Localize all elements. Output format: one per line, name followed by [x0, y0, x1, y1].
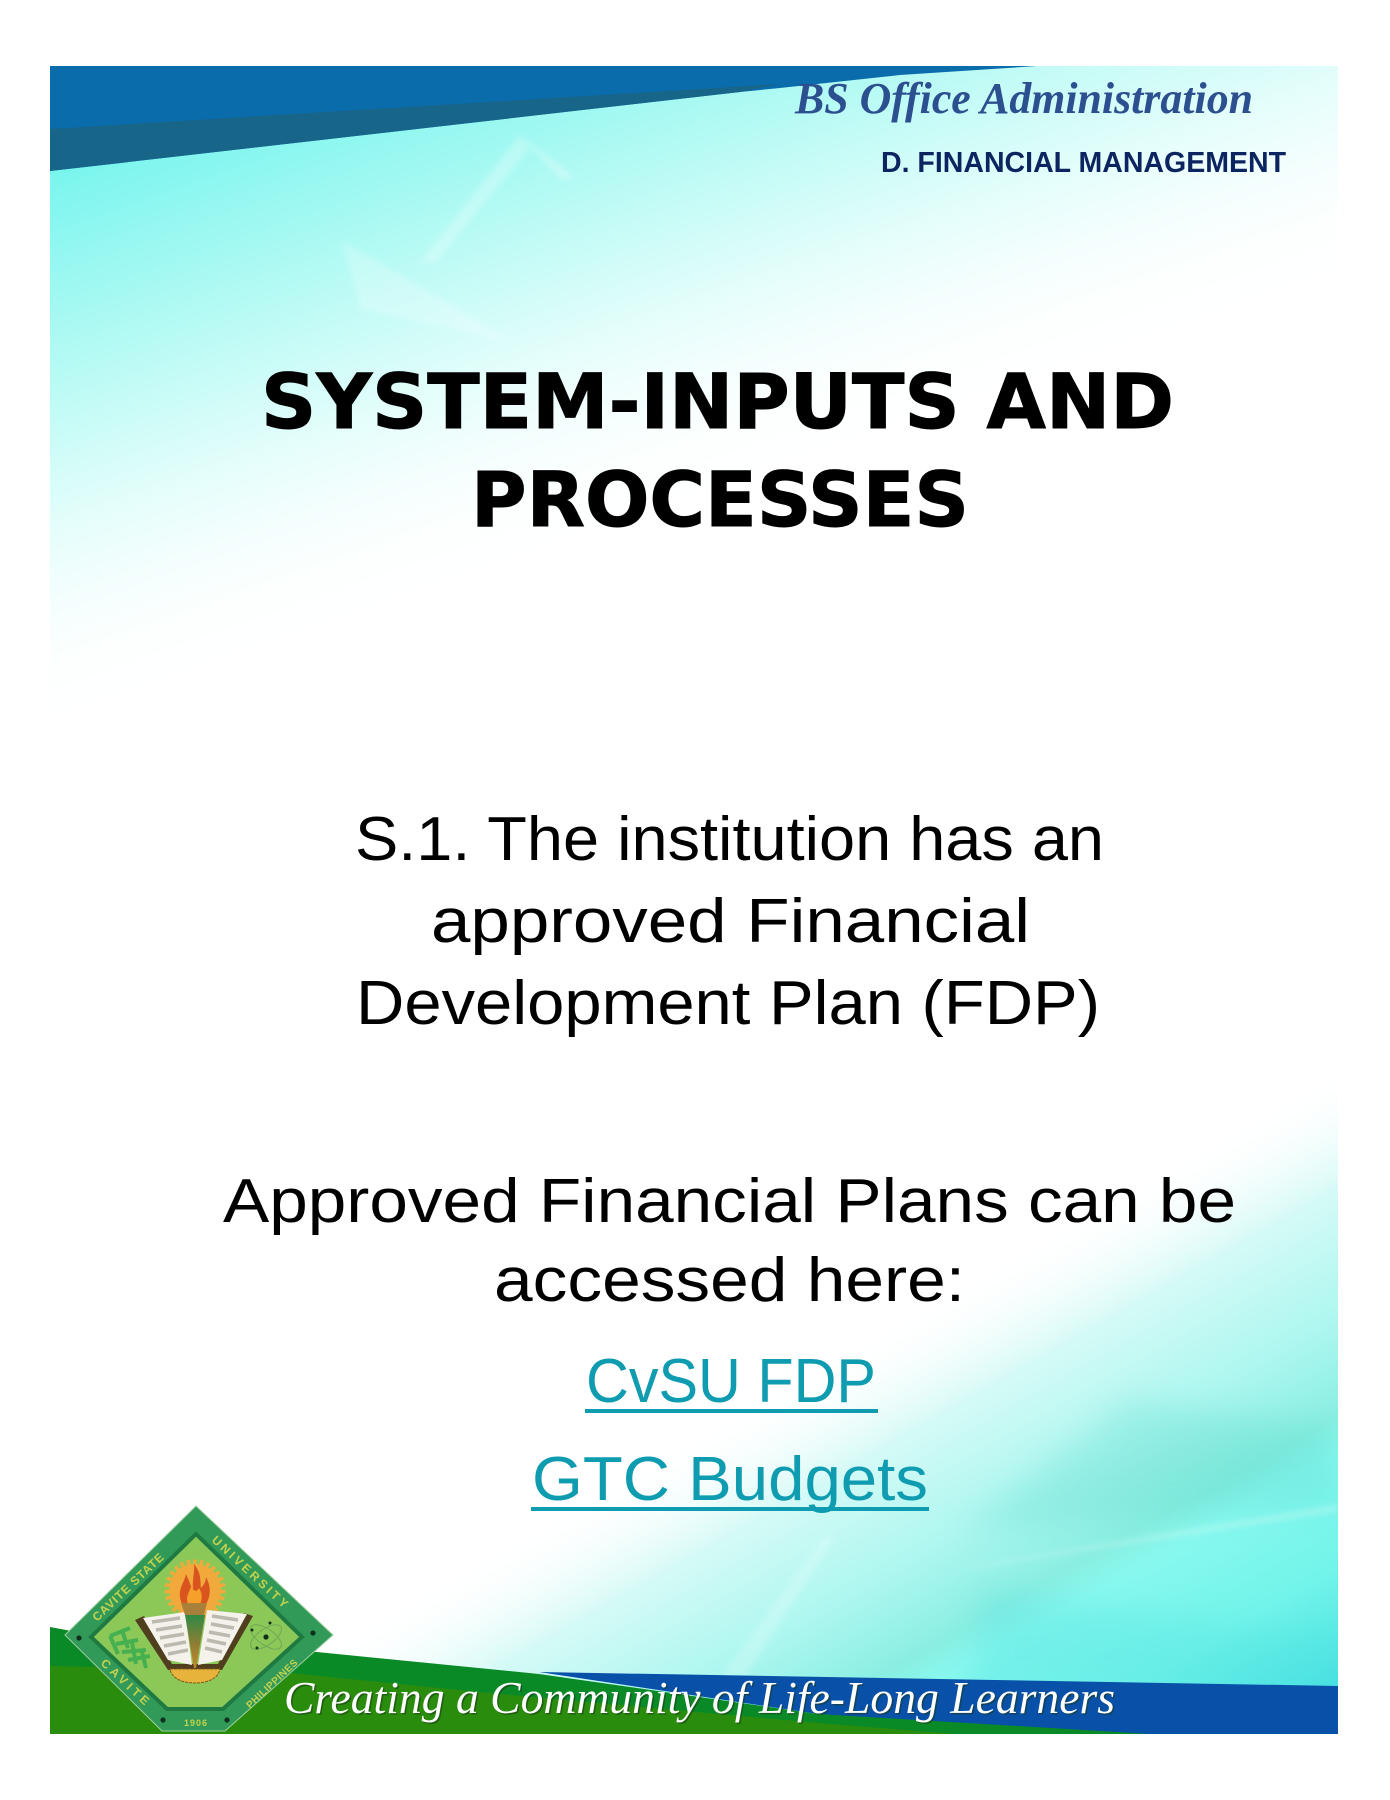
footer wave [50, 1627, 1338, 1734]
text block: standard S.1 [355, 805, 1104, 1038]
title: SYSTEM-INPUTS AND [261, 357, 1174, 446]
text block: standard S.1: Development Plan (FDP) [356, 969, 1100, 1038]
seal: lettering: CAVITE [102, 1660, 150, 1706]
seal: lettering: CAVITE STATE [93, 1552, 164, 1620]
seal: gear [170, 1669, 220, 1683]
text block: access note: Approved Financial Plans can be [223, 1167, 1236, 1236]
title [261, 357, 1174, 544]
link: GTC Budgets: GTC Budgets [532, 1445, 928, 1514]
seal: atom [247, 1620, 285, 1654]
text block: access note [223, 1167, 1236, 1315]
title: PROCESSES [471, 455, 969, 544]
seal: lettering: PHILIPPINES [246, 1660, 298, 1708]
program name: BS Office Administration [794, 74, 1253, 123]
tagline: Creating a Community of Life-Long Learners [284, 1672, 1115, 1723]
text block: access note: accessed here: [494, 1246, 965, 1315]
link: CvSU FDP: CvSU FDP [586, 1347, 876, 1416]
seal: torch [181, 1603, 207, 1668]
seal: corner dots [76, 1630, 316, 1723]
logo: Cavite State University seal [64, 1505, 334, 1732]
seal: lettering: 1906 [184, 1718, 208, 1728]
seal: lettering: UNIVERSITY [212, 1536, 289, 1606]
top banner [50, 66, 1037, 171]
seal: flame [180, 1564, 210, 1604]
seal: sun [167, 1562, 223, 1618]
section label: D. FINANCIAL MANAGEMENT [881, 147, 1286, 179]
tagline: Creating a Community of Life-Long Learners [286, 1674, 1116, 1724]
seal: book [135, 1610, 253, 1670]
text block: standard S.1: S.1. The institution has an [355, 805, 1104, 874]
text block: standard S.1: approved Financial [431, 887, 1030, 956]
seal: wheat [110, 1628, 150, 1668]
seal: lettering [93, 1536, 298, 1728]
